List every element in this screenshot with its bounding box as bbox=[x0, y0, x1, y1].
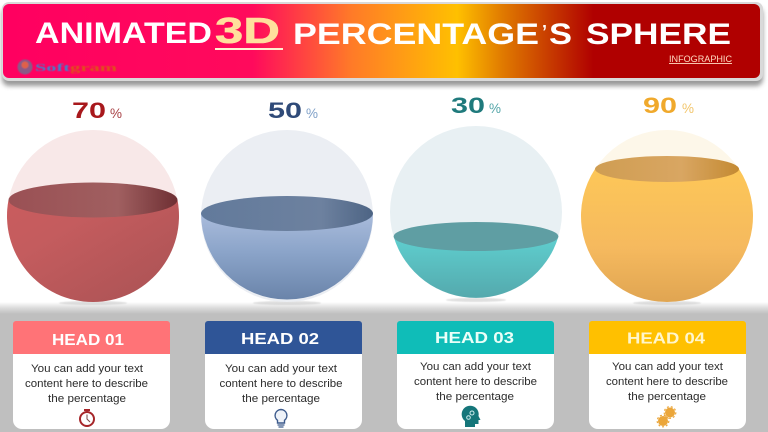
description 04: the percentage bbox=[628, 391, 706, 403]
percentage: 50%: % bbox=[306, 105, 318, 121]
heading 01: HEAD 01 bbox=[52, 332, 124, 349]
percentage: 90%: 90 bbox=[643, 93, 677, 118]
title: S bbox=[549, 18, 572, 51]
icon: stopwatch bbox=[80, 409, 94, 426]
percentage: 90% bbox=[643, 93, 694, 118]
title banner bbox=[2, 2, 763, 86]
heading bar 02 bbox=[205, 321, 362, 354]
heading bar 03 bbox=[397, 321, 554, 354]
panel: head 02 bbox=[205, 321, 362, 429]
description 04: content here to describe bbox=[606, 376, 728, 388]
description 04: You can add your text bbox=[612, 361, 723, 373]
logo: Softgram: gram bbox=[70, 62, 117, 74]
logo: Softgram: Soft bbox=[35, 62, 71, 74]
title bbox=[35, 10, 731, 51]
sphere 3: teal 30 percent bbox=[390, 126, 562, 302]
percentage: 30%: 30 bbox=[451, 93, 485, 118]
description 01: You can add your text bbox=[31, 363, 143, 375]
heading 04: HEAD 04 bbox=[627, 330, 705, 348]
percentage: 50% bbox=[268, 98, 318, 123]
percentage: 70%: 70 bbox=[72, 98, 106, 123]
panel: head 01 bbox=[13, 321, 170, 429]
title: 3D bbox=[215, 10, 280, 51]
icon: light bulb bbox=[275, 410, 287, 427]
description 02: You can add your text bbox=[225, 363, 337, 375]
description 03: content here to describe bbox=[414, 376, 537, 388]
percentage: 70% bbox=[72, 98, 122, 123]
panel: head 04 bbox=[589, 321, 746, 429]
sphere 4: yellow 90 percent bbox=[581, 130, 753, 305]
title: SPHERE bbox=[586, 18, 731, 51]
icon: head with gears bbox=[462, 406, 480, 427]
description 02 bbox=[220, 363, 342, 405]
description 01 bbox=[25, 363, 148, 405]
percentage: 30% bbox=[451, 93, 501, 118]
lower grey band bbox=[0, 302, 768, 432]
heading bar 04 bbox=[589, 321, 746, 354]
sphere 1: red 70 percent bbox=[7, 130, 179, 305]
heading 02: HEAD 02 bbox=[241, 331, 319, 348]
heading bar 01 bbox=[13, 321, 170, 354]
title: PERCENTAGE bbox=[293, 18, 539, 51]
percentage: 70%: % bbox=[110, 105, 122, 121]
sphere 2: blue 50 percent bbox=[201, 130, 373, 305]
description 03: the percentage bbox=[436, 391, 514, 403]
logo: Softgram bbox=[18, 60, 117, 74]
title: ANIMATED bbox=[35, 17, 212, 50]
description 01: the percentage bbox=[48, 393, 126, 405]
percentage: 30%: % bbox=[489, 100, 501, 116]
description 03: You can add your text bbox=[420, 361, 531, 373]
icon: gears bbox=[657, 407, 676, 427]
description 02: content here to describe bbox=[220, 378, 342, 390]
description 01: content here to describe bbox=[25, 378, 148, 390]
title: ’ bbox=[542, 22, 547, 42]
percentage: 50%: 50 bbox=[268, 98, 302, 123]
description 04 bbox=[606, 361, 728, 403]
description 02: the percentage bbox=[242, 393, 320, 405]
heading 03: HEAD 03 bbox=[435, 330, 514, 347]
panel: head 03 bbox=[397, 321, 554, 429]
percentage: 90%: % bbox=[682, 100, 694, 116]
subtitle: infographic: INFOGRAPHIC bbox=[669, 54, 732, 64]
description 03 bbox=[414, 361, 537, 403]
